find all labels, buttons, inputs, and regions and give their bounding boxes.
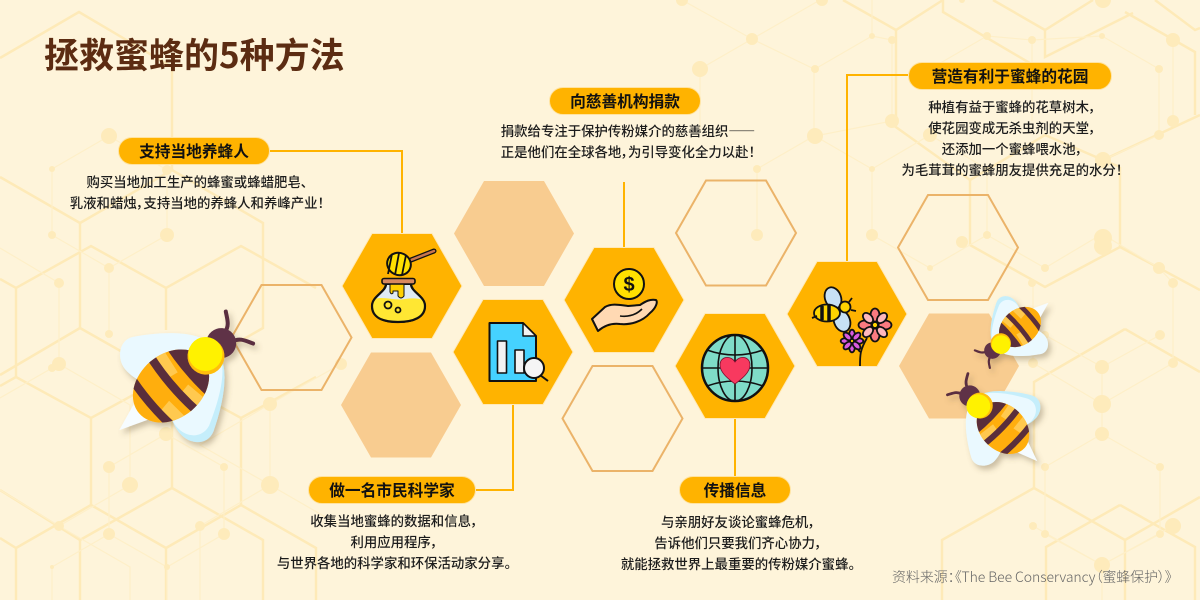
heading: plant a bee-friendly garden xyxy=(908,62,1112,90)
text: plant a bee-friendly garden: 种植有益于蜜蜂的花草树木， xyxy=(928,96,1096,116)
illustration: small bee at upper right xyxy=(959,276,1071,386)
heading: spread the word: 传播信息 xyxy=(704,478,766,501)
heading: donate to charities: 向慈善机构捐款 xyxy=(570,89,680,112)
text: donate to charities: 正是他们在全球各地，为引导变化全力以赴！ xyxy=(501,141,755,161)
text: be a citizen scientist: 与世界各地的科学家和环保活动家分享。 xyxy=(277,552,511,572)
heading: spread the word xyxy=(679,476,791,504)
heading: be a citizen scientist xyxy=(308,476,476,504)
text: support local beekeepers: 乳液和蜡烛，支持当地的养蜂人和养峰产业！ xyxy=(70,192,324,212)
text: spread the word: 告诉他们只要我们齐心协力， xyxy=(654,532,822,552)
heading: plant a bee-friendly garden: 营造有利于蜜蜂的花园 xyxy=(932,64,1088,87)
icon: globe with heart xyxy=(702,335,768,401)
text: be a citizen scientist: 收集当地蜜蜂的数据和信息， xyxy=(310,510,478,530)
decorative tan hexagons xyxy=(341,181,1019,458)
icon: coin over open hand: $ xyxy=(623,274,635,296)
text: plant a bee-friendly garden: 为毛茸茸的蜜蜂朋友提供充足的水分！ xyxy=(902,158,1122,178)
text: be a citizen scientist xyxy=(277,510,511,572)
text: donate to charities: 捐款给专注于保护传粉媒介的慈善组织—— xyxy=(501,120,755,140)
icon: report with bars and magnifier xyxy=(490,323,548,381)
icon: coin over open hand xyxy=(592,269,657,331)
illustration: large bee at left xyxy=(78,279,281,479)
illustration: medium bee at lower right xyxy=(927,352,1068,493)
orange icon hexagons xyxy=(342,234,907,418)
text: support local beekeepers: 购买当地加工生产的蜂蜜或蜂蜡肥皂、 xyxy=(87,171,307,191)
text: spread the word: 就能拯救世界上最重要的传粉媒介蜜蜂。 xyxy=(621,552,855,572)
heading: donate to charities xyxy=(549,87,701,115)
text: plant a bee-friendly garden xyxy=(902,96,1122,178)
title: 拯救蜜蜂的5种方法 xyxy=(44,28,345,79)
text: be a citizen scientist: 利用应用程序， xyxy=(350,531,438,551)
text: support local beekeepers xyxy=(70,171,324,212)
connector lines xyxy=(270,75,908,490)
text: spread the word xyxy=(621,510,855,572)
icon: honey pot and dipper xyxy=(372,249,434,322)
heading: be a citizen scientist: 做一名市民科学家 xyxy=(329,478,455,501)
text: plant a bee-friendly garden: 使花园变成无杀虫剂的天堂， xyxy=(928,116,1096,136)
text: donate to charities xyxy=(501,120,755,161)
source credit: 资料来源：《The Bee Conservancy（蜜蜂保护）》 xyxy=(892,567,1172,587)
heading: support local beekeepers xyxy=(118,137,270,165)
text: spread the word: 与亲朋好友谈论蜜蜂危机， xyxy=(661,510,815,530)
icon: bee on flowers xyxy=(812,285,892,366)
outlined empty hexagons xyxy=(232,180,1018,471)
heading: support local beekeepers: 支持当地养蜂人 xyxy=(139,139,249,162)
text: plant a bee-friendly garden: 还添加一个蜜蜂喂水池， xyxy=(942,138,1082,158)
